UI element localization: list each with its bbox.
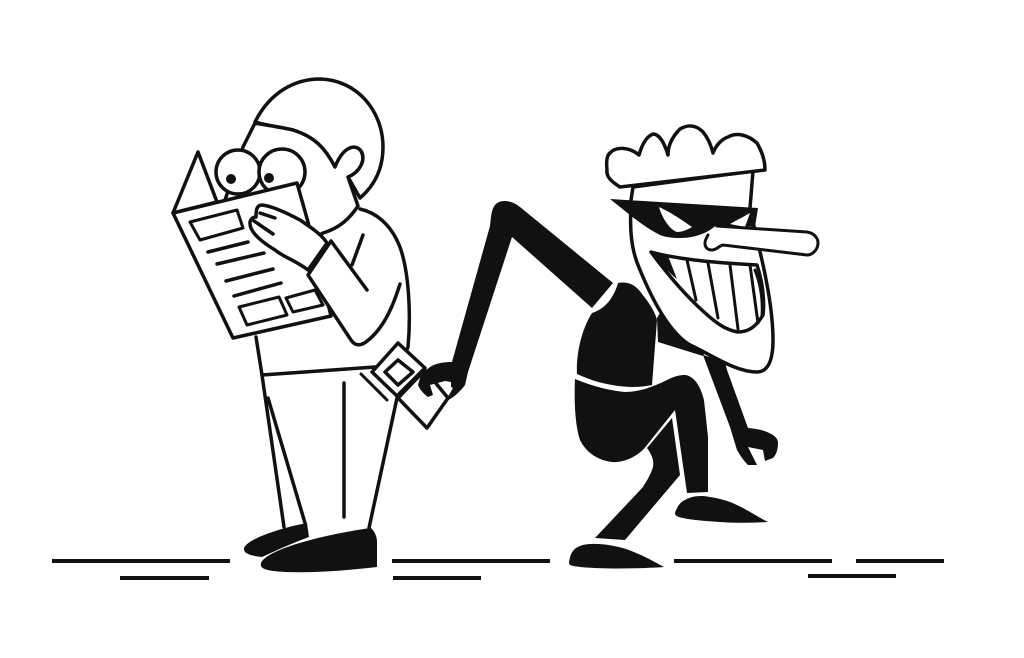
thief: left eye xyxy=(659,207,692,232)
thief xyxy=(418,126,818,568)
man: torso xyxy=(256,209,409,375)
thief: head xyxy=(631,171,773,372)
wallet: inner diamond xyxy=(385,360,413,385)
stolen wallet xyxy=(361,343,448,428)
wallet: outer diamond xyxy=(372,343,425,396)
newspaper: back page corner xyxy=(173,152,217,213)
newspaper xyxy=(173,152,331,338)
ground lines xyxy=(52,561,944,578)
thief: hat xyxy=(607,126,765,187)
thief: front leg xyxy=(595,418,680,540)
man: head xyxy=(225,79,383,240)
thief: mask xyxy=(610,199,758,238)
newspaper: picture box xyxy=(239,297,287,325)
wallet: card xyxy=(398,370,448,428)
newspaper: headline box xyxy=(190,210,243,240)
man reading newspaper xyxy=(173,79,409,572)
man: left eye xyxy=(216,150,260,194)
man: back shoe xyxy=(244,523,309,557)
thief: back foot xyxy=(675,496,768,523)
thief: collar xyxy=(657,295,712,356)
man: sleeve xyxy=(308,235,400,345)
man: hand holding newspaper xyxy=(250,205,327,270)
newspaper: small box xyxy=(286,290,323,312)
man: waist line xyxy=(262,367,375,375)
man: front shoe xyxy=(261,528,377,572)
thief: back arm and hand xyxy=(703,355,778,465)
thief: torso xyxy=(577,282,657,387)
newspaper: text lines xyxy=(208,242,281,296)
thief: mouth with teeth xyxy=(651,252,764,332)
newspaper: front page xyxy=(173,183,331,338)
wallet: strap xyxy=(361,374,387,400)
thief: nose xyxy=(705,226,818,255)
thief: hips and thigh xyxy=(575,375,708,493)
thief: right eye xyxy=(730,213,750,227)
thief: outstretched arm and hand xyxy=(418,201,613,402)
man: trousers xyxy=(262,375,397,528)
thief: front foot xyxy=(569,544,664,568)
man: right eye xyxy=(259,149,305,195)
